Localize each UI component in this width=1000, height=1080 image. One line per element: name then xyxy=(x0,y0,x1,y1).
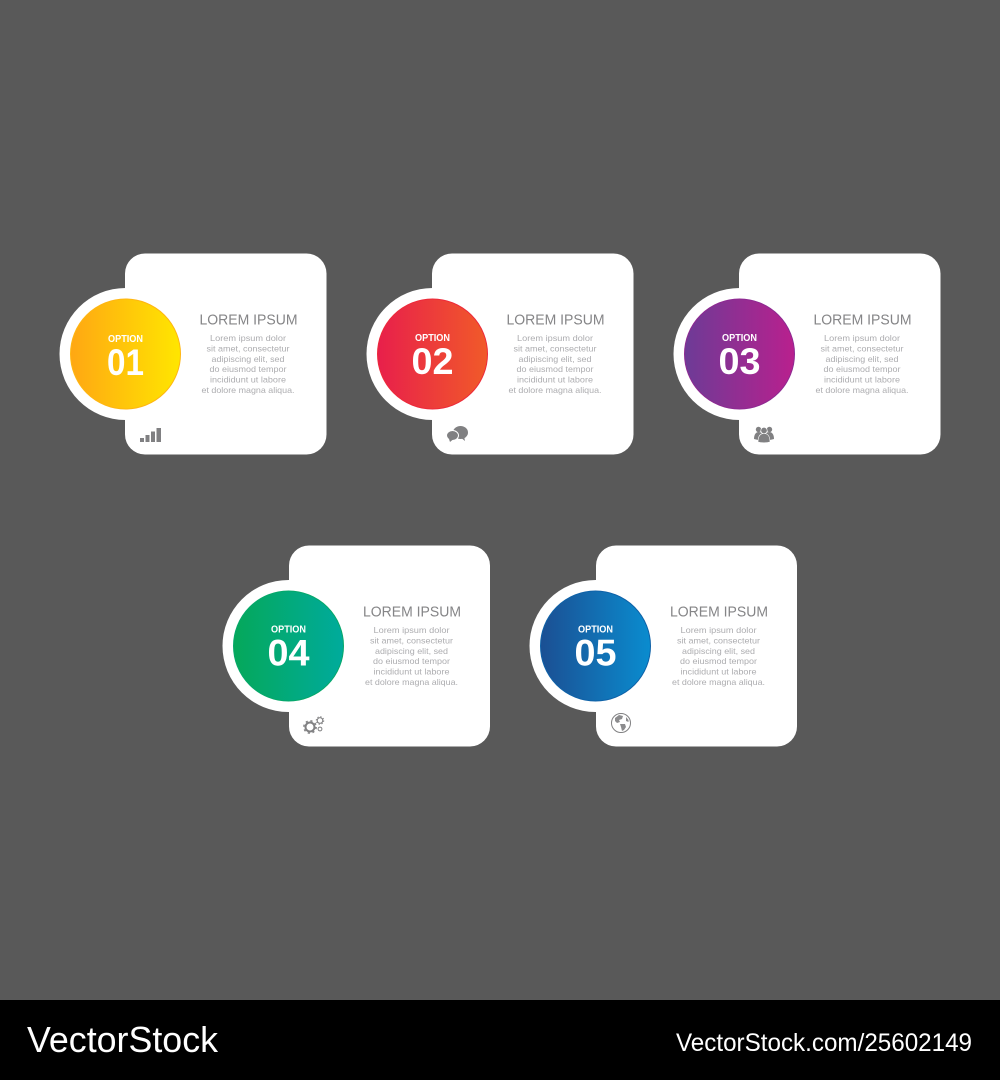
icon: globe xyxy=(612,714,630,732)
body text 04: sit amet, consectetur xyxy=(370,635,453,645)
heading 04: LOREM IPSUM xyxy=(363,604,461,620)
body text 02: Lorem ipsum dolor xyxy=(517,333,593,343)
body text 04 xyxy=(365,625,458,687)
panel: option 03 xyxy=(674,254,940,454)
card 05 xyxy=(596,546,797,746)
body text 04: do eiusmod tempor xyxy=(373,656,450,666)
heading 05: LOREM IPSUM xyxy=(670,604,768,620)
body text 01: do eiusmod tempor xyxy=(210,364,287,374)
heading 03: LOREM IPSUM xyxy=(814,312,912,328)
body text 05: do eiusmod tempor xyxy=(680,656,757,666)
body text 03: sit amet, consectetur xyxy=(820,343,904,353)
body text 02 xyxy=(508,333,602,395)
body text 01: sit amet, consectetur xyxy=(206,343,290,353)
body text 02: adipiscing elit, sed xyxy=(518,354,592,364)
option label 03: OPTION xyxy=(722,333,757,344)
number 04: 04 xyxy=(268,632,310,674)
option label 01: OPTION xyxy=(108,334,143,345)
body text 05: adipiscing elit, sed xyxy=(682,646,755,656)
body text 05 xyxy=(672,625,765,687)
circle ring 04 xyxy=(222,580,354,712)
body text 02: sit amet, consectetur xyxy=(514,343,597,353)
body text 01: adipiscing elit, sed xyxy=(212,354,285,364)
circle ring 02 xyxy=(366,288,498,420)
card 04 xyxy=(289,546,490,746)
option label 05: OPTION xyxy=(578,624,613,636)
body text 01: Lorem ipsum dolor xyxy=(210,333,286,343)
icon: chat bubbles xyxy=(446,426,468,442)
option label 04: OPTION xyxy=(271,624,306,636)
body text 01: et dolore magna aliqua. xyxy=(202,385,294,395)
body text 04: incididunt ut labore xyxy=(374,667,450,677)
body text 02: do eiusmod tempor xyxy=(516,364,594,374)
number 03: 03 xyxy=(718,341,760,382)
body text 05: incididunt ut labore xyxy=(680,667,757,677)
card 01 xyxy=(125,254,326,454)
body text 02: et dolore magna aliqua. xyxy=(508,385,602,395)
body text 04: et dolore magna aliqua. xyxy=(365,677,458,687)
number 05: 05 xyxy=(574,632,616,674)
icon: gears xyxy=(304,717,324,733)
circle ring 01 xyxy=(60,288,192,420)
circle ring 05 xyxy=(530,580,662,712)
body text 02: incididunt ut labore xyxy=(517,375,593,385)
body text 01 xyxy=(202,333,294,395)
panel: option 01 xyxy=(60,254,326,454)
number 01: 01 xyxy=(107,342,144,383)
footer brand: VectorStock xyxy=(27,1019,219,1060)
number 02: 02 xyxy=(412,341,454,382)
body text 03 xyxy=(816,333,908,395)
card 02 xyxy=(432,254,634,454)
panel: option 04 xyxy=(222,546,490,746)
card 03 xyxy=(739,254,940,454)
body text 04: adipiscing elit, sed xyxy=(375,646,448,656)
gradient circle 01 xyxy=(70,299,180,409)
footer url: VectorStock.com/25602149 xyxy=(676,1029,972,1057)
panel: option 02 xyxy=(366,254,634,454)
panel: option 05 xyxy=(530,546,797,746)
body text 03: et dolore magna aliqua. xyxy=(816,385,908,395)
body text 01: incididunt ut labore xyxy=(210,375,286,385)
gradient circle 05 xyxy=(540,591,650,701)
gradient circle 03 xyxy=(684,299,794,409)
body text 05: sit amet, consectetur xyxy=(677,635,760,645)
body text 04: Lorem ipsum dolor xyxy=(374,625,450,635)
heading 01: LOREM IPSUM xyxy=(200,312,298,328)
option label 02: OPTION xyxy=(415,333,450,344)
body text 03: Lorem ipsum dolor xyxy=(824,333,900,343)
icon: signal bars xyxy=(140,428,161,442)
heading 02: LOREM IPSUM xyxy=(506,312,604,328)
body text 03: incididunt ut labore xyxy=(824,375,900,385)
icon: people xyxy=(754,427,774,443)
footer bar xyxy=(0,1000,1000,1080)
gradient circle 02 xyxy=(378,299,488,409)
circle ring 03 xyxy=(674,288,806,420)
body text 03: adipiscing elit, sed xyxy=(826,354,899,364)
body text 05: Lorem ipsum dolor xyxy=(680,625,757,635)
body text 03: do eiusmod tempor xyxy=(824,364,901,374)
body text 05: et dolore magna aliqua. xyxy=(672,677,765,687)
gradient circle 04 xyxy=(234,591,344,701)
